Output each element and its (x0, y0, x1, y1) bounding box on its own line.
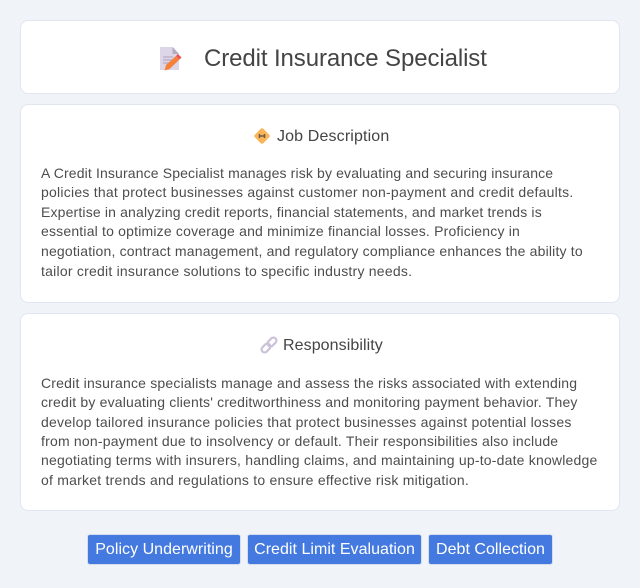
text block: responsibility: Credit insurance specialists manage and assess the risks associated with extending (41, 375, 577, 391)
text block: job description: essential to optimize coverage and minimize financial losses. Proficiency in (41, 223, 520, 239)
text block: job description: A Credit Insurance Specialist manages risk by evaluating and securing insurance (41, 165, 553, 181)
icon: chain link (260, 336, 278, 354)
text block: responsibility: from non-payment due to insolvency or default. Their responsibilities also include (41, 433, 558, 449)
tag: policy underwriting: Policy Underwriting (95, 541, 233, 558)
text block: job description (41, 165, 583, 279)
text block: responsibility: develop tailored insurance policies that protect businesses against potential losses (41, 414, 572, 430)
tag: debt collection (428, 534, 553, 565)
text block: responsibility: credit by evaluating clients' creditworthiness and monitoring payment behavior. They (41, 394, 578, 410)
heading: job description: Job Description (277, 128, 389, 145)
icon: document with pencil (160, 47, 182, 70)
panel: title card (20, 20, 620, 94)
panel: responsibility (20, 313, 620, 511)
panel: job description (20, 104, 620, 303)
tag: debt collection: Debt Collection (436, 541, 545, 558)
icon: diamond sign (254, 128, 270, 144)
text block: job description: tailor credit insurance solutions to specific industry needs. (41, 263, 412, 279)
heading: responsibility: Responsibility (283, 337, 383, 354)
heading: title: Credit Insurance Specialist (204, 45, 487, 72)
tag: credit limit evaluation (247, 534, 422, 565)
text block: responsibility: of market trends and regulations to ensure effective risk mitigation. (41, 472, 469, 488)
text block: responsibility: negotiating terms with insurers, handling claims, and maintaining up-to-date knowledge (41, 452, 598, 468)
text block: responsibility (41, 375, 598, 488)
text block: job description: negotiation, contract management, and regulatory compliance enhances the ability to (41, 243, 583, 259)
tag: credit limit evaluation: Credit Limit Evaluation (254, 541, 415, 558)
text block: job description: Expertise in analyzing credit reports, financial statements, and market trends is (41, 204, 542, 220)
tag: policy underwriting (87, 534, 241, 565)
text block: job description: policies that protect businesses against customer non-payment and credit defaults. (41, 184, 574, 200)
